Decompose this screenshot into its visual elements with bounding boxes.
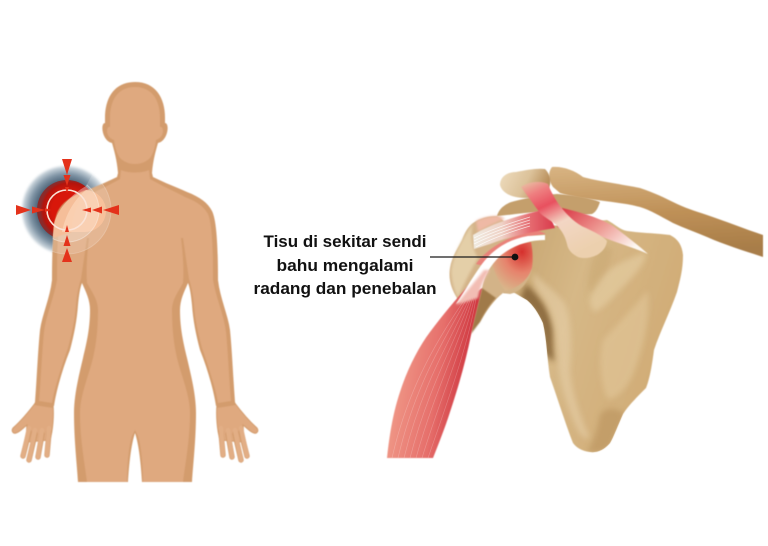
scapula bone: [503, 220, 683, 452]
label text: inflamed tissue: radang dan penebalan: [254, 279, 436, 298]
biceps muscle: [387, 284, 482, 458]
clavicle bone: [549, 167, 763, 257]
human body silhouette: [12, 82, 258, 482]
inflamed bursa: [490, 242, 533, 291]
icon: pain glow behind shoulder: [22, 166, 110, 254]
label text: inflamed tissue: [254, 232, 436, 298]
right ligament band: [557, 208, 648, 254]
icon: red arrows pointing to shoulder: [16, 159, 119, 262]
inflamed shoulder highlight: [53, 190, 86, 238]
scapula shading: [520, 246, 648, 452]
supraspinatus tendon band: [473, 209, 555, 249]
humerus head: [449, 216, 532, 334]
coracoid ligament: [521, 182, 607, 258]
label text: inflamed tissue: Tisu di sekitar sendi: [264, 232, 426, 251]
neck shadow: [118, 161, 152, 172]
acromioclavicular end: [500, 169, 550, 198]
icon: concentric pain rings: [46, 176, 112, 254]
callout leader line with dot: [430, 254, 518, 260]
muscle fibres: [392, 285, 478, 458]
acromion bone: [497, 194, 600, 216]
tendon fibres: [474, 217, 530, 247]
label text: inflamed tissue: bahu mengalami: [276, 256, 414, 275]
panel: shoulder joint anatomy: [387, 167, 763, 458]
biceps tendon: [456, 235, 545, 304]
pink tissue above tendon: [476, 229, 546, 266]
panel: body figure with shoulder pain: [12, 82, 258, 482]
